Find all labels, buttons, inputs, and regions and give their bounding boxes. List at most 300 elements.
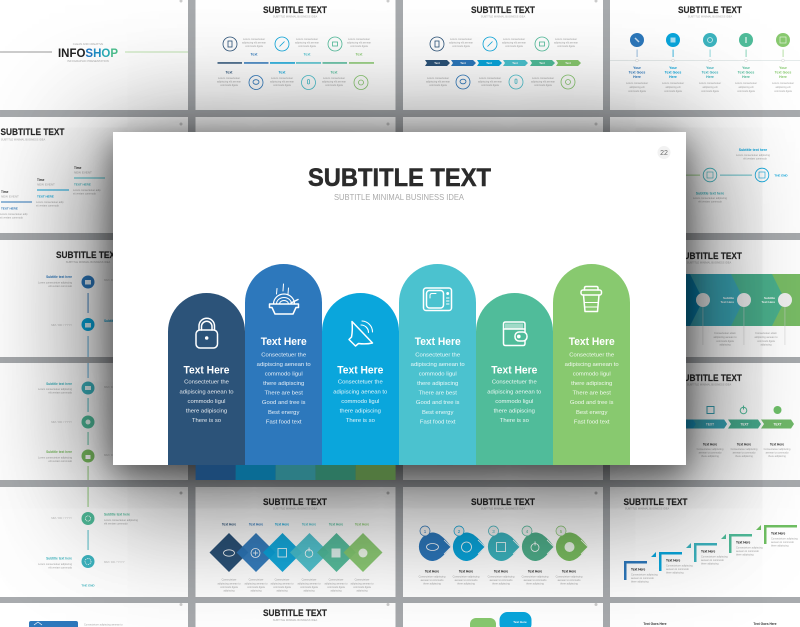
slide: diamonds: commodo ligula: [273, 586, 291, 589]
slide: bottom row right: [610, 603, 800, 627]
slide: vertical timeline one: SUBTITLE TEXT: [56, 250, 120, 260]
slide: vertical timeline three: Subtitle text here: [46, 556, 72, 560]
slide: circle path: Subtitle text here: [696, 192, 724, 196]
slide: vertical timeline three: elit veniam commodo: [104, 522, 128, 526]
slide: staircase time events: SUBTITLE TEXT: [0, 127, 65, 137]
slide: stepped stairs: aenean to commodo: [666, 568, 689, 571]
slide: dotted timeline: Lorem consectetuer: [626, 82, 648, 85]
slide: cover: [0, 0, 188, 110]
body text: Fast food text: [574, 419, 610, 425]
slide: chevron band: [610, 240, 800, 357]
slide: circle icons timeline: Text: [331, 70, 338, 74]
slide: stepped stairs: Text Here: [771, 532, 786, 536]
slide: vertical timeline three: Subtitle text here: [104, 512, 130, 516]
slide: circle icons timeline: commodo ligula: [245, 45, 263, 48]
slide: diamonds: Consectetuer: [329, 578, 344, 582]
slide: circle path: elit veniam commodo: [698, 200, 722, 204]
slide: diamonds: adipiscing aenean to: [218, 582, 241, 586]
slide: vertical timeline three: Lorem consectetuer adipiscing: [104, 519, 139, 522]
slide: icon arrows: Consectetuer adipiscing: [731, 448, 758, 451]
slide: vertical timeline one: Subtitle text here: [46, 275, 72, 279]
slide: arrow timeline: Lorem consectetuer: [427, 77, 449, 80]
slide: icon arrows: Consectetuer adipiscing: [697, 448, 724, 451]
slide: chevron band: adipiscing aenean to: [714, 336, 737, 339]
main title: SUBTITLE TEXT: [308, 164, 491, 192]
slide: dotted timeline: adipiscing elit: [629, 86, 645, 89]
slide: dotted timeline: Here: [706, 75, 714, 79]
slide: diamonds: Text Here: [249, 522, 263, 526]
slide: dotted timeline: adipiscing elit: [665, 86, 681, 89]
slide: arrow timeline: Text: [565, 61, 571, 65]
body text: Consectetuer the: [415, 352, 461, 358]
slide: circle path: THE END: [774, 174, 788, 178]
slide: dotted timeline: Your: [669, 66, 677, 70]
slide: staircase time events: [0, 117, 188, 233]
panel shadow: [113, 132, 686, 465]
body text: Consectetuer the: [261, 352, 307, 358]
slide: vertical timeline two: Subtitle text here: [46, 450, 72, 454]
slide: dotted timeline: commodo ligula: [628, 90, 646, 93]
slide: diamonds: adipiscing: [223, 590, 235, 592]
slide: bottom row right: Text Goes Here: [643, 622, 667, 626]
slide: vertical timeline three: elit veniam commodo: [48, 566, 73, 570]
slide: vertical timeline two: MM / DD / YYYY: [104, 453, 125, 457]
slide: circle icons timeline: Text: [304, 52, 311, 56]
slide: cover: CLEAN AND CREATIVE: [73, 42, 103, 46]
slide: diamonds: SUBTITLE TEXT: [263, 497, 327, 507]
slide: staircase time events: TEXT HERE: [37, 194, 54, 198]
slide: icon arrows: there adipiscing: [735, 455, 753, 458]
slide: numbered teardrops: there adipiscing: [560, 582, 578, 586]
hidden slide colour strip: [196, 465, 396, 480]
slide: dotted timeline: Lorem consectetuer: [772, 82, 794, 85]
slide: circle icons timeline: Lorem consectetuer: [218, 77, 240, 80]
slide: stepped stairs: there adipiscing: [701, 562, 719, 566]
slide: dotted timeline: Lorem consectetuer: [662, 82, 684, 85]
slide: stepped stairs: Consectetuer adipiscing: [771, 538, 798, 540]
slide: diamonds: Text Here: [275, 522, 289, 526]
slide: chevron band: Consectetuer etiam: [755, 332, 777, 335]
slide: vertical timeline three: MM / DD / YYYY: [104, 560, 125, 564]
slide: diamonds: adipiscing aenean to: [298, 582, 321, 586]
slide: diamonds: adipiscing: [330, 590, 342, 592]
slide: chevron band: Text Here: [721, 300, 734, 304]
slide: vertical timeline two: [0, 363, 188, 480]
slide: diamonds: [196, 487, 396, 597]
slide: numbered teardrops: aenean to commodo: [490, 579, 513, 582]
body text: There is so: [192, 418, 222, 424]
slide: chevron band: commodo ligula: [716, 340, 734, 343]
body text: There is so: [500, 418, 530, 424]
body text: there adipiscing: [417, 381, 458, 387]
slide: icon arrows: [610, 363, 800, 480]
body text: commodo ligul: [495, 399, 533, 405]
slide: arrow timeline: Lorem consectetuer: [532, 77, 554, 80]
body text: adipiscing aenean to: [257, 362, 311, 368]
slide: circle icons timeline: Text: [226, 70, 233, 74]
slide strip: row four middle: [403, 363, 603, 480]
heading: Text Here: [491, 364, 537, 376]
body text: Best energy: [422, 410, 453, 416]
body text: adipiscing aenean to: [411, 362, 465, 368]
main panel: [113, 132, 686, 465]
slide: numbered teardrops: Consectetuer adipiscing: [488, 576, 515, 578]
slide: numbered teardrops: aenean to commodo: [524, 579, 547, 582]
icon: speaker: [349, 321, 372, 346]
column: television: [399, 264, 476, 465]
slide: chevron band: adipiscing: [719, 344, 731, 346]
slide: circle path: [610, 117, 800, 233]
slide: numbered teardrops: there adipiscing: [526, 582, 544, 586]
slide: bottom row centre left: SUBTITLE MINIMAL BUSINESS IDEA: [273, 618, 317, 622]
main subtitle: SUBTITLE MINIMAL BUSINESS IDEA: [334, 193, 465, 202]
slide: numbered teardrops: there adipiscing: [492, 582, 510, 586]
slide: numbered teardrops: Text Here: [459, 570, 473, 574]
slide: numbered teardrops: Consectetuer adipiscing: [556, 576, 583, 578]
heading: Text Here: [261, 336, 307, 348]
slide: icon arrows: Text Here: [703, 442, 717, 446]
slide: circle icons timeline: Lorem consectetuer: [296, 38, 318, 41]
slide: numbered teardrops: Text Here: [425, 570, 439, 574]
slide: circle icons timeline: SUBTITLE MINIMAL BUSINESS IDEA: [273, 14, 317, 18]
slide: arrow timeline: commodo ligula: [429, 84, 447, 87]
slide: icon arrows: there adipiscing: [768, 455, 786, 458]
slide: stepped stairs: aenean to commodo: [771, 541, 794, 544]
slide: arrow timeline: Lorem consectetuer: [555, 38, 577, 41]
slide: stepped stairs: Consectetuer adipiscing: [666, 564, 693, 568]
slide: circle icons timeline: adipiscing elit aenean: [295, 42, 320, 44]
column: coffee cup: [553, 264, 630, 465]
slide: dotted timeline: Text Goes: [738, 70, 754, 74]
body text: there adipiscing: [494, 409, 535, 415]
slide: staircase time events: NEW EVENT: [74, 170, 92, 174]
slide: diamonds: adipiscing: [356, 590, 368, 592]
slide: dotted timeline: Lorem consectetuer: [735, 82, 757, 85]
slide: vertical timeline one: MM / DD / YYYY: [104, 278, 125, 282]
slide: vertical timeline two: MM / DD / YYYY: [51, 420, 72, 424]
slide: arrow timeline: Lorem consectetuer: [450, 38, 472, 41]
slide: vertical timeline one: [0, 240, 188, 357]
slide: dotted timeline: Your: [633, 66, 641, 70]
slide: dotted timeline: Your: [742, 66, 750, 70]
slide: bottom row left: Consectetuer adipiscing aenean to: [84, 624, 123, 626]
slide: staircase time events: TEXT HERE: [1, 206, 18, 210]
body text: Fast food text: [266, 419, 302, 425]
slide: chevron band: Subtitle: [764, 296, 775, 300]
slide: stepped stairs: aenean to commodo: [701, 559, 724, 562]
body text: Consectetuer the: [184, 380, 230, 386]
body text: Good and tree is: [416, 400, 460, 406]
slide: vertical timeline two: MM / DD / YYYY: [104, 385, 125, 389]
slide: vertical timeline two: Lorem consectetuer adipiscing: [38, 456, 73, 460]
body text: Consectetuer the: [569, 352, 615, 358]
slide: numbered teardrops: there adipiscing: [457, 582, 475, 586]
slide: icon arrows: Consectetuer adipiscing: [764, 448, 791, 451]
slide: bottom row centre left: SUBTITLE TEXT: [263, 608, 327, 618]
slide: arrow timeline: commodo ligula: [534, 84, 552, 87]
slide: arrow timeline: Lorem consectetuer: [479, 77, 501, 80]
slide: staircase time events: NEW EVENT: [1, 194, 19, 198]
slide: icon arrows: TEXT: [773, 422, 782, 426]
slide: vertical timeline one: SUBTITLE MINIMAL BUSINESS IDEA: [66, 260, 110, 264]
slide: staircase time events: Lorem consectetuer adip: [0, 213, 28, 216]
slide: stepped stairs: SUBTITLE MINIMAL BUSINESS IDEA: [625, 506, 669, 510]
body text: there adipiscing: [571, 381, 612, 387]
slide: arrow timeline: commodo ligula: [505, 45, 523, 48]
heading: Text Here: [184, 364, 230, 376]
slide: numbered teardrops: 2: [458, 529, 461, 534]
slide: circle path: elit veniam commodo: [743, 158, 767, 160]
slide: diamonds: commodo ligula: [327, 586, 345, 589]
slide: circle icons timeline: adipiscing elit aenean: [242, 42, 267, 44]
slide: staircase time events: Time: [37, 178, 45, 182]
slide: arrow timeline: adipiscing elit aenean: [554, 42, 579, 44]
slide: icon arrows: Text Here: [770, 442, 784, 446]
slide: numbered teardrops: [403, 487, 603, 597]
slide: diamonds: adipiscing aenean to: [271, 582, 294, 586]
slide: bottom row centre right: Text Here: [513, 620, 527, 624]
slide: arrow timeline: Lorem consectetuer: [503, 38, 525, 41]
icon: wallet: [504, 322, 527, 346]
slide: dotted timeline: Text Goes: [702, 70, 718, 74]
slide: dotted timeline: SUBTITLE TEXT: [678, 5, 742, 15]
slide: chevron band: SUBTITLE TEXT: [678, 251, 742, 261]
body text: There are best: [419, 391, 457, 397]
slide: circle icons timeline: Text: [279, 70, 286, 74]
slide: circle icons timeline: commodo ligula: [220, 84, 238, 87]
slide: arrow timeline: adipiscing elit aenean: [531, 80, 556, 84]
slide: icon arrows: aenean to commodo: [733, 452, 756, 454]
slide: numbered teardrops: Consectetuer adipiscing: [419, 576, 446, 578]
slide: numbered teardrops: Text Here: [494, 570, 508, 574]
slide: dotted timeline: adipiscing elit: [738, 86, 754, 89]
slide: vertical timeline three: Lorem consectetuer adipiscing: [38, 563, 73, 566]
slide: dotted timeline: SUBTITLE MINIMAL BUSINESS IDEA: [688, 14, 732, 18]
slide: chevron band: Consectetuer etiam: [714, 332, 736, 335]
slide: circle icons timeline: Text: [356, 52, 363, 56]
slide: arrow timeline: adipiscing elit aenean: [426, 80, 451, 84]
slide: stepped stairs: Consectetuer adipiscing: [736, 546, 763, 550]
column: speaker: [322, 293, 399, 465]
slide: stepped stairs: Consectetuer adipiscing: [631, 574, 658, 576]
slide: dotted timeline: commodo ligula: [774, 90, 792, 93]
icon: noodle bowl: [270, 284, 298, 314]
slide strip: row two middle: [196, 117, 603, 233]
slide: vertical timeline one: Lorem consectetuer adipiscing: [38, 282, 73, 284]
slide: dotted timeline: Lorem consectetuer: [699, 82, 721, 85]
slide: dotted timeline: Your: [779, 66, 787, 70]
slide: circle icons timeline: commodo ligula: [325, 84, 343, 87]
heading: Text Here: [415, 336, 461, 348]
page number badge: [658, 146, 670, 159]
slide: numbered teardrops: aenean to commodo: [455, 579, 478, 582]
slide: diamonds: adipiscing: [276, 590, 288, 592]
slide: dotted timeline: Text Goes: [629, 70, 645, 74]
slide: icon arrows: TEXT: [706, 422, 714, 426]
body text: Good and tree is: [570, 400, 614, 406]
body text: There is so: [346, 418, 376, 424]
slide: vertical timeline one: MM / DD / YYYY: [51, 323, 72, 327]
slide: bottom row right: Text Goes Here: [753, 622, 777, 626]
slide: staircase time events: Lorem consectetuer adip: [73, 189, 101, 192]
slide: diamonds: adipiscing: [250, 590, 262, 592]
body text: Best energy: [268, 410, 299, 416]
slide: circle icons timeline: adipiscing elit aenean: [347, 42, 372, 44]
slide: icon arrows: aenean to commodo: [766, 452, 789, 454]
slide: vertical timeline three: THE END: [81, 584, 95, 588]
column: lock: [168, 293, 245, 465]
slide: arrow timeline: adipiscing elit aenean: [478, 80, 503, 84]
slide: circle path: Subtitle text here: [739, 148, 767, 152]
slide: diamonds: commodo ligula: [353, 586, 371, 589]
body text: There are best: [573, 391, 611, 397]
body text: there adipiscing: [186, 409, 227, 415]
slide: circle icons timeline: Text: [251, 52, 258, 56]
slide: arrow timeline: SUBTITLE MINIMAL BUSINESS IDEA: [481, 14, 525, 18]
slide: chevron band: adipiscing: [760, 344, 772, 346]
body text: Fast food text: [420, 419, 456, 425]
slide: circle icons timeline: adipiscing elit aenean: [322, 80, 347, 84]
slide: arrow timeline: adipiscing elit aenean: [449, 42, 474, 44]
slide: stepped stairs: Consectetuer adipiscing: [701, 556, 728, 558]
slide: numbered teardrops: 1: [424, 529, 427, 534]
slide: diamonds: adipiscing aenean to: [245, 582, 268, 586]
slide: staircase time events: sit veniam commodo: [36, 204, 60, 208]
body text: commodo ligul: [419, 372, 457, 378]
body text: adipiscing aenean to: [333, 389, 388, 395]
slide: staircase time events: Lorem consectetuer adip: [36, 201, 64, 204]
body text: Good and tree is: [262, 400, 306, 406]
slide: stepped stairs: there adipiscing: [666, 572, 684, 574]
slide: circle icons timeline: adipiscing elit aenean: [270, 80, 295, 84]
slide: vertical timeline two: elit veniam commodo: [48, 392, 73, 394]
slide: dotted timeline: Here: [669, 75, 677, 79]
icon: coffee cup: [581, 286, 602, 312]
slide: diamonds: Text Here: [302, 522, 316, 526]
slide: arrow timeline: [403, 0, 603, 110]
slide: dotted timeline: Your: [706, 66, 714, 70]
slide: diamonds: Text Here: [355, 522, 369, 526]
slide: vertical timeline one: elit veniam commodo: [48, 285, 73, 288]
slide: circle path: Lorem consectetuer adipiscing: [736, 154, 771, 157]
body text: adipiscing aenean to: [487, 389, 542, 395]
slide: stepped stairs: SUBTITLE TEXT: [624, 497, 688, 507]
slide: vertical timeline two: Subtitle text here: [46, 382, 72, 386]
slide: icon arrows: Text Here: [737, 442, 751, 446]
slide: diamonds: Consectetuer: [222, 578, 237, 582]
slide: arrow timeline: Text: [486, 61, 492, 65]
slide: circle icons timeline: commodo ligula: [350, 45, 368, 48]
slide: icon arrows: SUBTITLE TEXT: [678, 373, 742, 383]
slide: diamonds: Consectetuer: [275, 578, 290, 582]
column: wallet: [476, 293, 553, 465]
slide: numbered teardrops: 4: [526, 529, 529, 534]
slide: vertical timeline three: MM / DD / YYYY: [51, 516, 72, 520]
slide: numbered teardrops: Text Here: [562, 570, 576, 574]
slide: numbered teardrops: Consectetuer adipiscing: [522, 576, 549, 578]
slide: dotted timeline: commodo ligula: [737, 90, 755, 93]
body text: adipiscing aenean to: [179, 389, 234, 395]
body text: adipiscing aenean to: [565, 362, 619, 368]
slide: numbered teardrops: there adipiscing: [423, 582, 441, 586]
slide: stepped stairs: there adipiscing: [631, 580, 649, 584]
slide: numbered teardrops: SUBTITLE MINIMAL BUSINESS IDEA: [481, 506, 525, 510]
slide: stepped stairs: aenean to commodo: [736, 550, 759, 553]
slide: dotted timeline: Here: [633, 75, 641, 79]
heading: Text Here: [337, 364, 383, 376]
slide: icon arrows: TEXT: [740, 422, 749, 426]
slide: bottom row left: [0, 603, 188, 627]
slide: staircase time events: sit veniam commodo: [73, 192, 97, 196]
slide: stepped stairs: Text Here: [736, 540, 751, 544]
icon: lock: [196, 318, 218, 348]
slide: cover: INFOSHOP: [58, 46, 118, 60]
slide: diamonds: commodo ligula: [247, 586, 265, 589]
slide: diamonds: commodo ligula: [220, 586, 238, 589]
page number badge: 22: [660, 150, 668, 157]
slide: circle icons timeline: Lorem consectetuer: [323, 77, 345, 80]
slide: arrow timeline: Text: [512, 61, 518, 65]
slide: arrow timeline: Text: [434, 61, 440, 65]
slide: diamonds: Text Here: [329, 522, 343, 526]
slide: dotted timeline: commodo ligula: [701, 90, 719, 93]
slide: vertical timeline two: elit veniam commodo: [48, 460, 73, 463]
slide: numbered teardrops: Consectetuer adipiscing: [453, 576, 480, 578]
slide: stepped stairs: Text Here: [666, 558, 681, 562]
slide: arrow timeline: commodo ligula: [481, 84, 499, 87]
slide: vertical timeline one: Subtitle text here: [104, 319, 130, 323]
slide: stepped stairs: Text Here: [631, 568, 646, 572]
slide: staircase time events: NEW EVENT: [37, 182, 55, 186]
column: noodles: [245, 264, 322, 465]
slide: numbered teardrops: 5: [560, 529, 563, 534]
body text: commodo ligul: [188, 399, 225, 405]
slide: circle icons timeline: commodo ligula: [298, 45, 316, 48]
slide: chevron band: Text Here: [762, 300, 775, 304]
slide: dotted timeline: commodo ligula: [664, 90, 682, 93]
body text: commodo ligul: [573, 372, 611, 378]
slide: dotted timeline: Here: [742, 75, 750, 79]
icon: television: [424, 288, 452, 310]
slide: dotted timeline: Here: [779, 75, 787, 79]
slide: vertical timeline two: Lorem consectetuer adipiscing: [38, 388, 73, 391]
body text: there adipiscing: [263, 381, 304, 387]
body text: There are best: [265, 391, 303, 397]
slide: numbered teardrops: SUBTITLE TEXT: [471, 497, 535, 507]
body text: Consectetuer the: [338, 380, 383, 386]
slide: diamonds: adipiscing aenean to: [325, 582, 348, 586]
body text: Consectetuer the: [492, 380, 537, 386]
slide: staircase time events: SUBTITLE MINIMAL BUSINESS IDEA: [1, 138, 45, 142]
slide: arrow timeline: Text: [539, 61, 545, 65]
heading: Text Here: [569, 336, 615, 348]
slide: dotted timeline: Text Goes: [665, 70, 681, 74]
slide: staircase time events: Time: [74, 166, 82, 170]
body text: commodo ligul: [341, 399, 379, 405]
slide: circle icons timeline: adipiscing elit aenean: [217, 80, 242, 84]
slide: icon arrows: there adipiscing: [701, 455, 719, 458]
slide: numbered teardrops: aenean to commodo: [421, 579, 444, 582]
slide: diamonds: Consectetuer: [249, 578, 264, 582]
slide: numbered teardrops: 3: [492, 529, 495, 534]
slide: chevron band: SUBTITLE MINIMAL BUSINESS IDEA: [687, 260, 731, 264]
slide: circle icons timeline: Lorem consectetuer: [271, 77, 293, 80]
slide: dotted timeline: [610, 0, 800, 110]
slide: diamonds: Consectetuer: [302, 578, 317, 582]
slide: numbered teardrops: aenean to commodo: [558, 579, 581, 582]
slide: chevron band: commodo ligula: [757, 340, 775, 343]
slide: circle icons timeline: Lorem consectetuer: [348, 38, 370, 41]
